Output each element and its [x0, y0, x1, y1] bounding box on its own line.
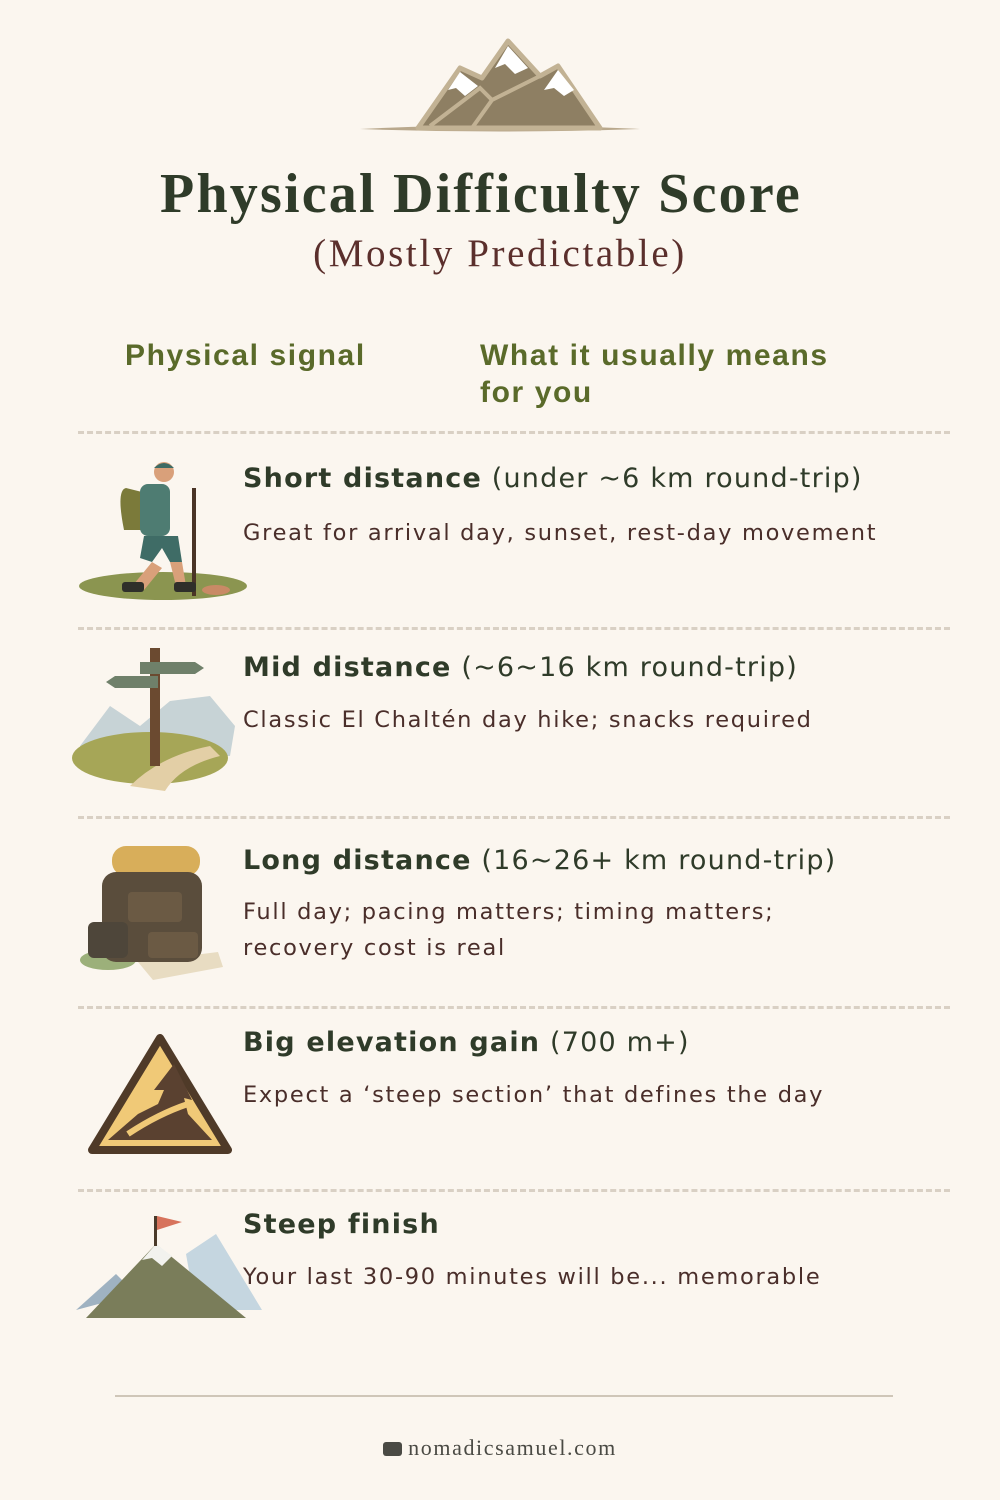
- subtitle: (Mostly Predictable): [313, 232, 687, 275]
- icon: hiker: [79, 462, 247, 600]
- row 3 description: Full day; pacing matters; timing matters;: [243, 899, 774, 925]
- row 4 heading: Big elevation gain (700 m+): [243, 1027, 690, 1058]
- row 5 description: Your last 30-90 minutes will be... memorable: [243, 1264, 821, 1290]
- row 4 description: Expect a ‘steep section’ that defines the day: [243, 1082, 824, 1108]
- icon: signpost: [72, 648, 235, 791]
- row 2 description: Classic El Chaltén day hike; snacks required: [243, 707, 813, 733]
- column header: meaning: for you: [480, 376, 593, 409]
- icon: backpack: [80, 846, 223, 980]
- row 2 heading: Mid distance (~6~16 km round-trip): [243, 652, 798, 683]
- column header: meaning: [480, 339, 829, 409]
- column header: signal: Physical signal: [125, 339, 366, 372]
- column header: meaning: What it usually means: [480, 339, 829, 372]
- title: Physical Difficulty Score: [160, 163, 802, 225]
- row 3 description: [243, 899, 774, 961]
- row 3 heading: Long distance (16~26+ km round-trip): [243, 845, 836, 876]
- row 5 heading: Steep finish: [243, 1209, 440, 1240]
- row 1 heading: Short distance (under ~6 km round-trip): [243, 463, 863, 494]
- icon: mountain logo: [361, 38, 639, 132]
- icon: summit with flag: [76, 1216, 262, 1318]
- row 3 description: recovery cost is real: [243, 935, 506, 961]
- row 1 description: Great for arrival day, sunset, rest-day movement: [243, 520, 877, 546]
- footer: nomadicsamuel.com: [408, 1435, 617, 1460]
- icon: warning triangle: [88, 1034, 232, 1154]
